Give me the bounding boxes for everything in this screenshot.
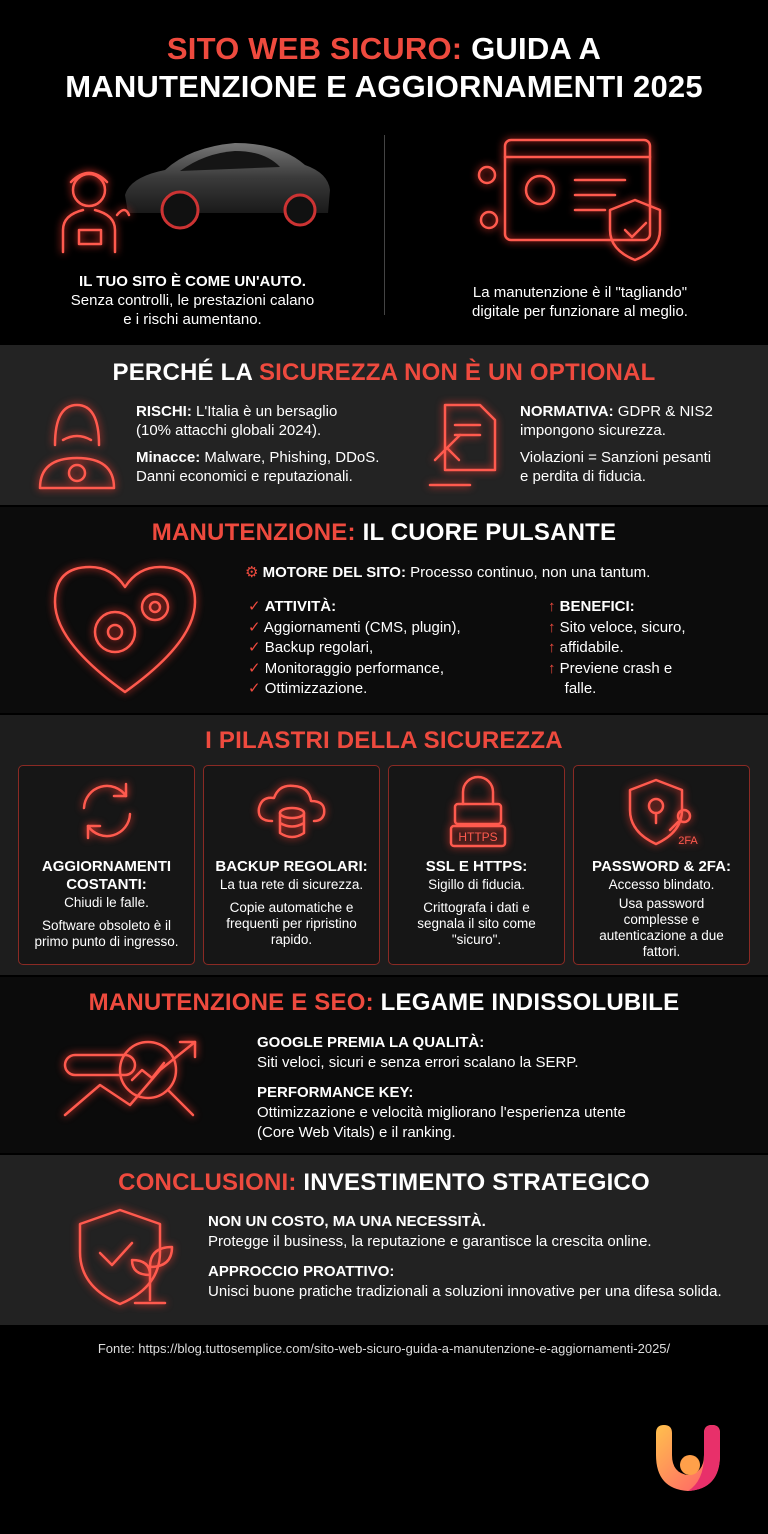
text: normativa: NORMATIVA: GDPR & NIS2 <box>520 403 713 420</box>
title <box>65 31 703 104</box>
card: aggiornamenti: Chiudi le falle. <box>64 895 149 910</box>
text: seo: Siti veloci, sicuri e senza errori scalano la SERP. PERFORMANCE KEY: <box>257 1054 579 1101</box>
text: normativa: e perdita di fiducia. <box>520 468 646 485</box>
text: normativa: impongono sicurezza. Violazioni = Sanzioni pesanti <box>520 422 711 466</box>
list: attività: ✓ Ottimizzazione. <box>248 680 367 697</box>
panel: manutenzione cuore <box>0 507 768 713</box>
list: attività: ✓ Aggiornamenti (CMS, plugin), <box>248 618 461 636</box>
text: car <box>71 272 314 328</box>
text: normativa <box>520 403 713 485</box>
card: aggiornamenti: COSTANTI: <box>66 876 147 893</box>
text: car: e i rischi aumentano. <box>123 311 262 328</box>
text: conclusioni: NON UN COSTO, MA UNA NECESSITÀ. <box>208 1213 486 1230</box>
icon: browser shield <box>472 132 668 267</box>
card: password <box>573 765 750 965</box>
text: maintenance: digitale per funzionare al meglio. <box>472 303 688 320</box>
card: aggiornamenti <box>18 765 195 965</box>
title: MANUTENZIONE E AGGIORNAMENTI 2025 <box>65 69 703 104</box>
card: aggiornamenti: primo punto di ingresso. <box>34 934 179 949</box>
heading: MANUTENZIONE: IL CUORE PULSANTE <box>152 519 616 546</box>
panel: conclusioni <box>0 1155 768 1325</box>
list: attività: ✓ Backup regolari, <box>248 639 373 656</box>
list: attività: ✓ ATTIVITÀ: <box>248 598 336 615</box>
list: benefici: ↑ BENEFICI: <box>548 598 635 615</box>
panel: intro <box>55 132 688 328</box>
card: backup: BACKUP REGOLARI: <box>215 858 368 875</box>
text: conclusioni: Unisci buone pratiche tradizionali a soluzioni innovative per una difesa solida. <box>208 1283 722 1300</box>
heading: MANUTENZIONE E SEO: LEGAME INDISSOLUBILE <box>89 989 679 1016</box>
icon: search chart <box>58 1034 203 1120</box>
card: ssl: "sicuro". <box>452 932 501 947</box>
source: Fonte: https://blog.tuttosemplice.com/sito-web-sicuro-guida-a-manutenzione-e-aggiornamenti-2025/ <box>98 1341 670 1356</box>
text: seo <box>257 1034 626 1141</box>
text: rischi <box>136 403 379 485</box>
text: motore: ⚙ MOTORE DEL SITO: Processo continuo, non una tantum. <box>245 564 650 581</box>
text: seo: (Core Web Vitals) e il ranking. <box>257 1124 456 1141</box>
text: car: Senza controlli, le prestazioni calano <box>71 292 314 309</box>
heading: PERCHÉ LA SICUREZZA NON È UN OPTIONAL <box>112 359 655 386</box>
card: password: Accesso blindato. <box>609 877 714 892</box>
icon: mechanic <box>55 165 135 258</box>
list: attività: ✓ Monitoraggio performance, <box>248 660 444 676</box>
icon: car <box>125 143 330 230</box>
text: conclusioni: Protegge il business, la reputazione e garantisce la crescita online. APPROCCIO PROATTIVO: <box>208 1233 652 1280</box>
card: ssl: HTTPS <box>458 830 498 844</box>
card: password: autenticazione a due <box>599 928 724 943</box>
card: ssl: Sigillo di fiducia. <box>428 877 525 892</box>
text: conclusioni <box>208 1212 722 1300</box>
card: ssl: Crittografa i dati e <box>423 900 530 915</box>
card: backup: rapido. <box>271 932 312 947</box>
card: aggiornamenti: Software obsoleto è il <box>42 918 171 933</box>
card: password: fattori. <box>643 944 680 959</box>
text: car: IL TUO SITO È COME UN'AUTO. <box>79 273 306 290</box>
list: benefici: ↑ Sito veloce, sicuro, <box>548 618 686 636</box>
card: ssl <box>388 765 565 965</box>
card: backup: La tua rete di sicurezza. <box>220 877 363 892</box>
icon: gavel document <box>426 398 502 492</box>
list: attività <box>248 598 461 697</box>
title: SITO WEB SICURO: GUIDA A <box>167 31 601 66</box>
text: rischi: RISCHI: L'Italia è un bersaglio <box>136 403 337 420</box>
heading: I PILASTRI DELLA SICUREZZA <box>205 727 563 754</box>
list: benefici: ↑ Previene crash e <box>548 660 672 676</box>
card: password: complesse e <box>624 912 699 927</box>
card: aggiornamenti: AGGIORNAMENTI <box>42 858 171 875</box>
icon: heart gears <box>48 560 202 698</box>
text: seo: Ottimizzazione e velocità migliorano l'esperienza utente <box>257 1104 626 1121</box>
panel: pilastri <box>0 715 768 975</box>
text: rischi: (10% attacchi globali 2024). Minacce: Malware, Phishing, DDoS. <box>136 422 379 466</box>
logo <box>656 1425 720 1491</box>
card: ssl: SSL E HTTPS: <box>426 858 527 875</box>
icon: hacker <box>33 398 121 496</box>
list: benefici: ↑ affidabile. <box>548 639 624 656</box>
panel: seo <box>0 977 768 1153</box>
card: backup <box>203 765 380 965</box>
card: ssl: segnala il sito come <box>417 916 536 931</box>
list: benefici <box>548 598 686 697</box>
card: password: Usa password <box>619 896 704 911</box>
heading: CONCLUSIONI: INVESTIMENTO STRATEGICO <box>118 1169 650 1196</box>
card: backup: frequenti per ripristino <box>226 916 357 931</box>
text: seo: GOOGLE PREMIA LA QUALITÀ: <box>257 1034 484 1051</box>
text: maintenance: La manutenzione è il "tagliando" <box>473 284 687 301</box>
list: benefici: falle. <box>565 680 596 697</box>
panel: perché sicurezza <box>0 345 768 505</box>
text: maintenance <box>472 284 688 320</box>
card: password: 2FA <box>678 835 698 847</box>
icon: shield plant <box>72 1204 179 1310</box>
card: backup: Copie automatiche e <box>230 900 353 915</box>
text: rischi: Danni economici e reputazionali. <box>136 468 353 485</box>
card: password: PASSWORD & 2FA: <box>592 858 731 875</box>
